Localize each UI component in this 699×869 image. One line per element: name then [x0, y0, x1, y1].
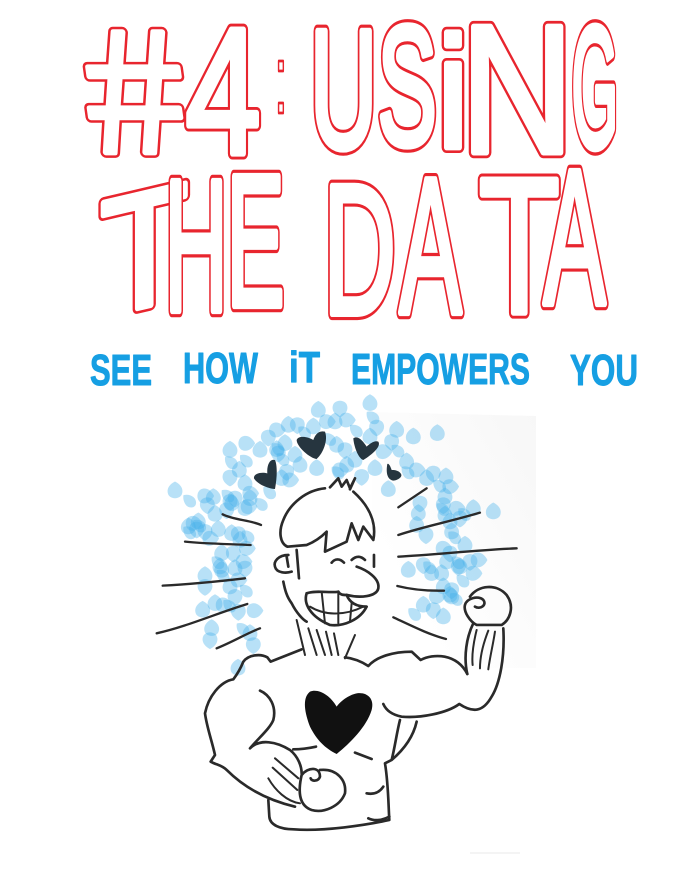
- title line 2: E: [226, 136, 285, 345]
- title line 2: H: [164, 143, 228, 352]
- subtitle: SEE HOW IT EMPOWERS YOU: YOU: [570, 346, 638, 395]
- subtitle: SEE HOW IT EMPOWERS YOU: HOW: [183, 344, 258, 393]
- title line 1: i: [437, 5, 469, 182]
- title line 2: T: [479, 139, 560, 355]
- small hearts above head: [254, 431, 401, 489]
- blue petal aura: [168, 394, 501, 676]
- title line 2: H: [164, 143, 228, 352]
- title: #4: USING THE DATA: [73, 0, 618, 355]
- title line 2: [100, 129, 606, 355]
- illustration: empowered muscular man: [157, 394, 517, 830]
- head with grin: [275, 478, 378, 625]
- title line 1: #: [73, 0, 196, 191]
- title line 2: D: [324, 146, 396, 353]
- subtitle: SEE HOW IT EMPOWERS YOU: SEE: [90, 346, 152, 395]
- title line 1: U: [310, 0, 377, 183]
- title line 1: [73, 0, 618, 192]
- paper background: [372, 412, 536, 668]
- title line 1: :: [274, 26, 288, 134]
- title line 2: A: [400, 139, 462, 355]
- subtitle: SEE HOW IT EMPOWERS YOU: EMPOWERS: [351, 345, 530, 394]
- title line 2: D: [324, 146, 396, 353]
- title line 2: A: [544, 129, 606, 344]
- title line 2: E: [226, 136, 285, 345]
- raised fist: [465, 587, 511, 625]
- muscular body: [205, 620, 504, 830]
- subtitle: SEE HOW IT EMPOWERS YOU: iT: [289, 343, 320, 392]
- large chest heart: [305, 691, 372, 754]
- paper edge line: [470, 852, 520, 854]
- title line 2: A: [544, 129, 606, 344]
- title line 2: T: [479, 139, 560, 355]
- action lines around the man: [157, 488, 517, 648]
- title line 1: U: [310, 0, 377, 183]
- title line 1: #: [73, 0, 196, 191]
- subtitle: SEE HOW IT EMPOWERS YOU: [90, 343, 638, 395]
- title line 2: T: [100, 148, 189, 353]
- title line 1: i: [437, 5, 469, 182]
- title line 2: T: [100, 148, 189, 353]
- title line 2: A: [400, 139, 462, 355]
